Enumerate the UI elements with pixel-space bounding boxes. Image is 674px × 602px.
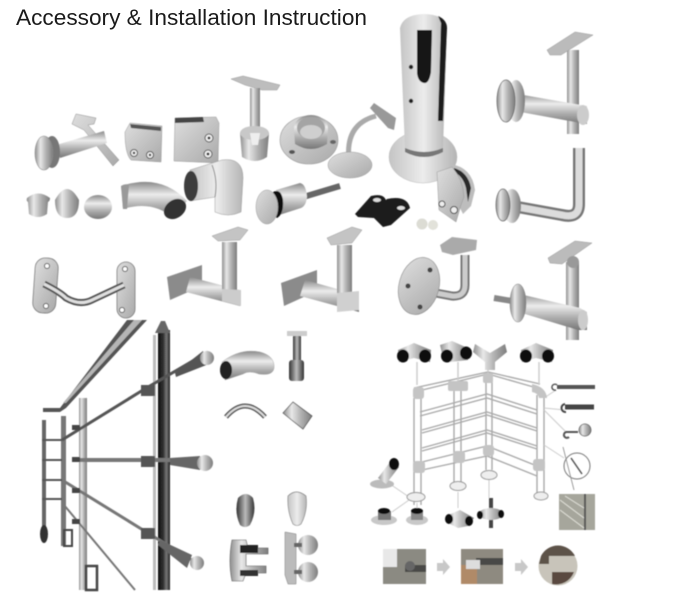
round plate bracket	[392, 237, 477, 319]
square elbow	[184, 160, 243, 215]
step photo 2	[461, 549, 503, 584]
saddle post	[231, 76, 280, 161]
bottom left and bottom center fittings	[370, 458, 504, 528]
curved tube elbow fitting	[220, 351, 274, 380]
post base flanges	[407, 470, 548, 502]
tension rods	[42, 352, 208, 590]
panel: cable railing illustration	[40, 320, 214, 590]
step photo 1	[383, 549, 426, 584]
arrow 2	[515, 559, 528, 575]
title: Accessory & Installation Instruction	[16, 5, 367, 30]
panel: accessories photo group	[27, 14, 475, 230]
top handrail	[43, 320, 147, 412]
frame joints	[413, 373, 547, 473]
curved elbow	[121, 182, 190, 223]
bullet fittings	[236, 492, 306, 527]
panel: installation steps	[383, 545, 578, 586]
post fitting	[287, 331, 307, 381]
hook handle with two plates	[32, 257, 135, 318]
pipe clamp fitting	[283, 402, 312, 429]
square bracket 1	[167, 227, 248, 306]
end caps	[27, 189, 112, 219]
panel: lower bracket row	[32, 227, 477, 319]
panel: corner railing diagram	[370, 341, 595, 530]
large glass clamp	[174, 117, 219, 163]
railing frame	[390, 362, 566, 513]
black gaskets	[355, 195, 410, 227]
small glass clamp	[125, 123, 162, 162]
split end fitting	[230, 540, 268, 581]
top fittings row	[397, 341, 554, 370]
glass connector with threaded rod	[256, 183, 340, 224]
panel: small railing fittings	[220, 331, 318, 584]
D-shaped glass clamp	[437, 164, 475, 222]
bracket 1 with tilting saddle	[497, 32, 593, 134]
handrail bracket with cross tube	[35, 114, 119, 170]
curved bracket	[328, 103, 396, 178]
square bracket 2	[281, 227, 362, 312]
thin elbow fitting	[226, 406, 265, 417]
side hardware	[552, 384, 595, 490]
cable detail photo	[559, 494, 595, 530]
posts	[40, 321, 170, 590]
round flange	[280, 115, 338, 164]
arrow 1	[437, 559, 450, 575]
bracket 2 L-shaped tube	[496, 148, 579, 223]
rod end fittings	[72, 351, 214, 570]
step photo 3 circular	[538, 545, 578, 586]
glass spigot post	[389, 14, 457, 183]
double ball fitting	[285, 532, 318, 584]
clear washers	[416, 218, 438, 230]
panel: right wall brackets	[494, 32, 593, 340]
bracket 3 with pin	[494, 241, 592, 340]
